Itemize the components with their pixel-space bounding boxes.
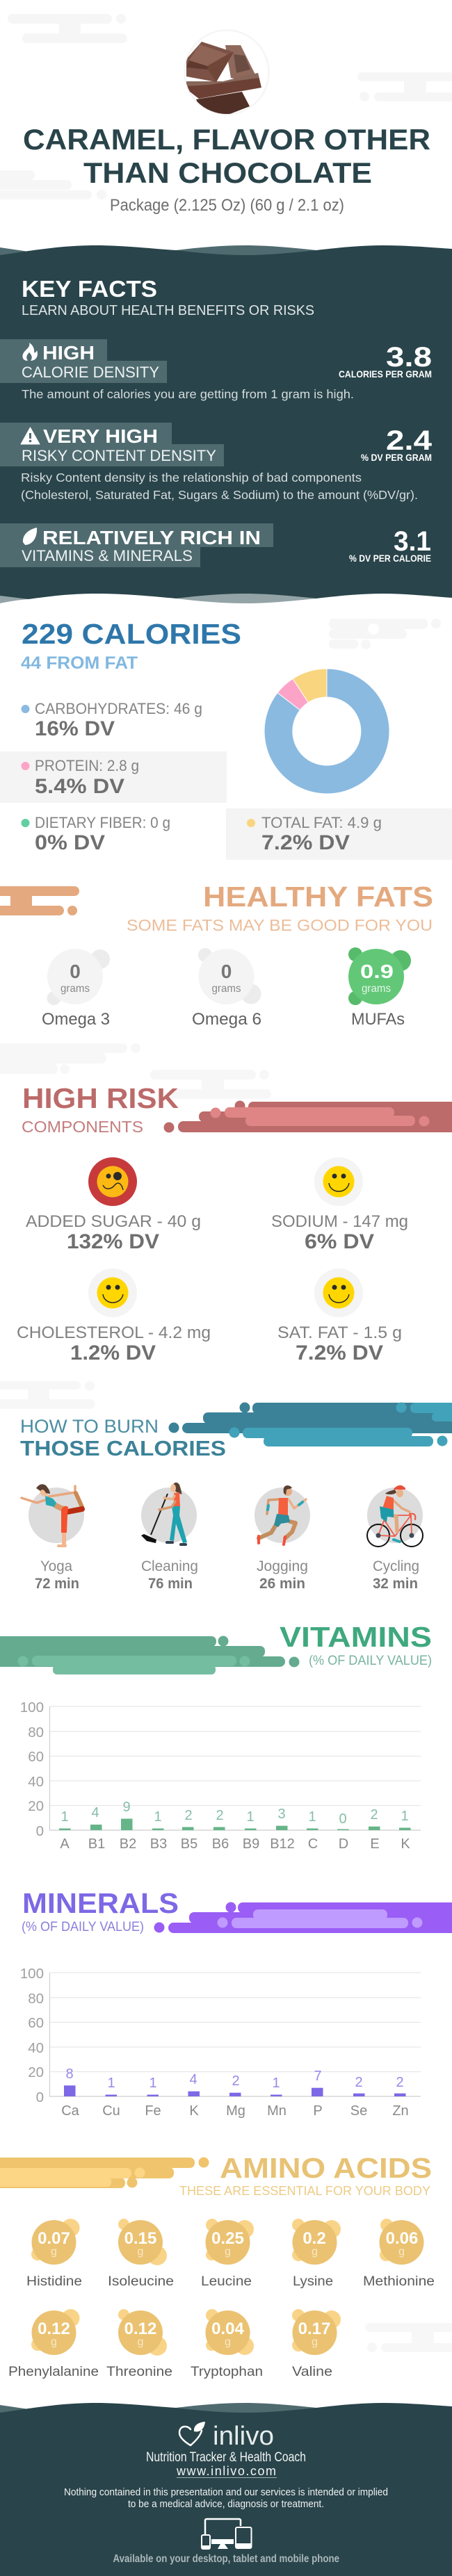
food photo: chocolate pieces	[185, 31, 268, 115]
high risk subheading: COMPONENTS	[22, 1118, 143, 1136]
risk item: sodium: SODIUM - 147 mg	[271, 1212, 408, 1231]
panel: healthy fats	[0, 881, 433, 1029]
legend: protein: PROTEIN: 2.8 g	[35, 757, 139, 774]
title	[23, 123, 430, 189]
bar chart: vitamins: 80	[28, 1725, 44, 1741]
amino: phenylalanine: 0.12	[38, 2320, 70, 2338]
activity labels: 32 min	[373, 1576, 418, 1592]
fact: calorie density: 3.8	[386, 342, 432, 373]
omega 6: 0	[221, 961, 232, 982]
fact: risky content density: Risky Content density is the relationship of bad components	[21, 471, 362, 484]
amino: isoleucine: 0.15	[124, 2229, 156, 2248]
healthy fats subheading: SOME FATS MAY BE GOOD FOR YOU	[127, 916, 433, 934]
decoration: amber bars	[0, 2158, 209, 2188]
amino: methionine: g	[398, 2246, 405, 2258]
fact: calorie density: CALORIES PER GRAM	[339, 368, 432, 380]
bar chart: vitamins: K	[401, 1836, 410, 1852]
fact: vitamins and minerals: VITAMINS & MINERALS	[22, 547, 193, 564]
amino: threonine: g	[138, 2336, 143, 2348]
bar chart: vitamins: 1	[154, 1809, 162, 1825]
fact: risky content density: 2.4	[386, 425, 433, 456]
bar chart: vitamins	[20, 1699, 421, 1852]
amino: isoleucine	[108, 2219, 174, 2289]
background decoration: header clouds	[0, 14, 452, 199]
amino: methionine: 0.06	[386, 2229, 418, 2248]
fact: vitamins and minerals: 3.1	[394, 526, 431, 557]
title: CARAMEL, FLAVOR OTHER	[23, 123, 430, 156]
bar chart: vitamins: 2	[370, 1807, 378, 1823]
bar chart: vitamins: 4	[91, 1805, 99, 1820]
decoration: purple bars	[154, 1902, 452, 1933]
decoration: green bars	[0, 1636, 299, 1674]
risk item: saturated fat: SAT. FAT - 1.5 g	[277, 1323, 402, 1342]
minerals heading: MINERALS	[22, 1887, 179, 1919]
activity: yoga	[22, 1484, 84, 1546]
bar chart: vitamins: E	[370, 1836, 380, 1852]
amino: tryptophan: Tryptophan	[191, 2365, 263, 2379]
activity: jogging	[255, 1485, 310, 1544]
risk item: cholesterol: 1.2% DV	[70, 1342, 156, 1364]
activity labels: Cleaning	[141, 1558, 198, 1574]
risk item: added sugar	[26, 1157, 201, 1253]
activity labels: 26 min	[259, 1576, 305, 1592]
bar chart: minerals: 40	[28, 2040, 44, 2056]
amino acids heading: AMINO ACIDS	[220, 2152, 432, 2184]
amino: leucine: g	[225, 2246, 231, 2258]
omega 6: grams	[211, 983, 241, 995]
risk item: cholesterol	[17, 1269, 211, 1364]
bar chart: vitamins: 2	[184, 1808, 193, 1823]
bar chart: vitamins: B1	[88, 1836, 105, 1852]
fact: vitamins and minerals	[0, 523, 431, 567]
bar chart: vitamins: 20	[28, 1798, 44, 1814]
risk item: added sugar: 132% DV	[67, 1230, 159, 1253]
amino: methionine	[363, 2219, 435, 2289]
calories heading: 229 CALORIES	[22, 618, 241, 650]
bar chart: vitamins: A	[60, 1836, 70, 1852]
amino: histidine: g	[51, 2246, 57, 2258]
high risk heading: HIGH RISK	[22, 1082, 179, 1114]
legend: dietary fiber	[21, 814, 170, 854]
amino: histidine: 0.07	[38, 2229, 70, 2248]
amino: phenylalanine: Phenylalanine	[8, 2365, 99, 2379]
fact: vitamins and minerals: RELATIVELY RICH IN	[42, 527, 261, 548]
bar chart: vitamins: B5	[181, 1836, 197, 1852]
activity labels: Jogging	[257, 1558, 308, 1574]
amino: histidine: Histidine	[26, 2274, 82, 2289]
mufas: 0.9	[360, 961, 394, 982]
amino: valine: g	[312, 2336, 318, 2348]
bar chart: minerals: Fe	[145, 2103, 161, 2119]
panel: minerals	[20, 1887, 452, 2119]
availability note: Available on your desktop, tablet and mobile phone	[113, 2553, 339, 2565]
disclaimer	[64, 2486, 388, 2510]
calories from fat: 44 FROM FAT	[21, 653, 138, 673]
amino: tryptophan: 0.04	[211, 2320, 245, 2338]
risk item: added sugar: ADDED SUGAR - 40 g	[26, 1212, 201, 1231]
panel: key facts	[0, 245, 452, 612]
key facts heading: KEY FACTS	[22, 276, 157, 302]
mufas: MUFAs	[351, 1010, 405, 1029]
risk item: sodium	[271, 1157, 408, 1253]
icon: flame	[22, 343, 38, 361]
bar chart: minerals: Mg	[226, 2103, 245, 2119]
serving size: Package (2.125 Oz) (60 g / 2.1 oz)	[110, 196, 344, 215]
amino: leucine	[201, 2219, 254, 2289]
bar chart: vitamins: 40	[28, 1774, 44, 1790]
bar chart: vitamins: D	[339, 1836, 348, 1852]
bar chart: vitamins: 2	[216, 1808, 224, 1823]
fact: risky content density: (Cholesterol, Saturated Fat, Sugars & Sodium) to the amount (%DV/gr).	[21, 488, 418, 502]
vitamins heading: VITAMINS	[280, 1621, 432, 1653]
key facts subheading: LEARN ABOUT HEALTH BENEFITS OR RISKS	[22, 302, 314, 318]
vitamins subheading: (% OF DAILY VALUE)	[309, 1653, 432, 1668]
website link: www.inlivo.com	[176, 2464, 276, 2478]
disclaimer: Nothing contained in this presentation and our services is intended or implied	[64, 2486, 388, 2498]
bar chart: vitamins: 9	[122, 1800, 131, 1815]
background decoration: mid clouds	[0, 1043, 452, 2352]
bar chart: vitamins: 0	[36, 1823, 44, 1839]
amino: phenylalanine	[8, 2309, 99, 2379]
amino: histidine	[26, 2219, 82, 2289]
icon: warning	[21, 427, 40, 444]
amino: valine: Valine	[292, 2365, 332, 2379]
omega 3	[42, 949, 110, 1029]
bar chart: minerals: 1	[272, 2076, 280, 2091]
bar chart: minerals: 8	[65, 2066, 74, 2082]
legend: protein: 5.4% DV	[35, 775, 124, 798]
amino: lysine: 0.2	[302, 2229, 326, 2248]
panel: how to burn those calories	[20, 1403, 452, 1592]
fact: calorie density: CALORIE DENSITY	[22, 364, 159, 381]
panel: vitamins	[0, 1621, 432, 1852]
activity labels: 76 min	[148, 1576, 193, 1592]
omega 3: Omega 3	[42, 1010, 110, 1029]
panel: calories	[0, 618, 452, 860]
legend: carbohydrates	[21, 700, 202, 740]
activity: cycling	[367, 1485, 423, 1547]
mufas: grams	[362, 983, 391, 995]
bar chart: vitamins: B3	[150, 1836, 167, 1852]
activity labels: Cycling	[373, 1558, 419, 1574]
icon: devices	[202, 2519, 252, 2549]
omega 6	[192, 948, 261, 1029]
legend: protein	[21, 757, 139, 798]
legend: dietary fiber: 0% DV	[35, 831, 105, 854]
decoration: teal bars	[168, 1403, 452, 1446]
minerals subheading: (% OF DAILY VALUE)	[22, 1919, 144, 1934]
burn heading light: HOW TO BURN	[20, 1416, 159, 1437]
bar chart: minerals: Zn	[392, 2103, 409, 2119]
amino: threonine: Threonine	[106, 2365, 172, 2379]
amino: lysine: Lysine	[293, 2274, 333, 2289]
bar chart: minerals: Cu	[102, 2103, 120, 2119]
fact: risky content density	[0, 423, 433, 502]
activity labels: 72 min	[35, 1576, 79, 1592]
amino: isoleucine: Isoleucine	[108, 2274, 174, 2289]
healthy fats heading: HEALTHY FATS	[203, 881, 433, 913]
fact: calorie density: The amount of calories you are getting from 1 gram is high.	[22, 387, 354, 401]
bar chart: minerals: 0	[36, 2089, 44, 2105]
legend: total fat	[247, 814, 382, 854]
fact: vitamins and minerals: % DV PER CALORIE	[349, 553, 431, 564]
mufas	[348, 947, 411, 1029]
legend: total fat: TOTAL FAT: 4.9 g	[261, 814, 382, 831]
donut chart	[264, 669, 389, 794]
fact: calorie density	[0, 339, 432, 401]
legend: carbohydrates: 16% DV	[35, 717, 115, 740]
bar chart: minerals: 1	[149, 2076, 157, 2091]
bar chart: minerals: 1	[107, 2076, 115, 2091]
bar chart: minerals: P	[313, 2103, 323, 2119]
activity labels: Yoga	[40, 1558, 72, 1574]
bar chart: vitamins: 1	[246, 1809, 255, 1825]
amino: phenylalanine: g	[51, 2336, 57, 2348]
fact: risky content density: % DV PER GRAM	[361, 452, 432, 463]
bar chart: vitamins: 3	[277, 1807, 286, 1822]
disclaimer: to be a medical advice, diagnosis or treatment.	[128, 2498, 324, 2510]
amino: valine	[292, 2309, 341, 2379]
risk item: cholesterol: CHOLESTEROL - 4.2 mg	[17, 1323, 211, 1342]
amino: lysine: g	[312, 2246, 318, 2258]
activity: cleaning	[141, 1483, 197, 1546]
risk item: saturated fat: 7.2% DV	[296, 1342, 383, 1364]
amino: isoleucine: g	[138, 2246, 143, 2258]
risk item: saturated fat	[277, 1269, 402, 1364]
decoration: red bars	[164, 1101, 452, 1133]
bar chart: vitamins: 1	[60, 1809, 69, 1825]
bar chart: vitamins: B9	[243, 1836, 259, 1852]
title: THAN CHOCOLATE	[83, 156, 372, 189]
amino: tryptophan	[191, 2309, 263, 2379]
bar chart: minerals: 60	[28, 2015, 44, 2031]
legend band: total fat	[226, 808, 452, 860]
amino: tryptophan: g	[225, 2336, 231, 2348]
bar chart: minerals	[20, 1966, 421, 2119]
bar chart: minerals: 100	[20, 1966, 44, 1982]
bar chart: minerals: Ca	[61, 2103, 80, 2119]
omega 3: grams	[60, 983, 90, 995]
icon: leaf	[23, 528, 37, 545]
bar chart: vitamins: C	[308, 1836, 318, 1852]
amino: lysine	[292, 2219, 341, 2289]
panel: amino acids	[0, 2152, 435, 2379]
bar chart: minerals: 20	[28, 2064, 44, 2080]
bar chart: minerals: Mn	[267, 2103, 286, 2119]
amino: threonine: 0.12	[124, 2320, 156, 2338]
bar chart: vitamins: 1	[308, 1809, 316, 1825]
bar chart: minerals: K	[189, 2103, 199, 2119]
fact: calorie density: HIGH	[42, 342, 95, 364]
logo: inlivo: inlivo	[213, 2422, 274, 2451]
omega 3: 0	[70, 961, 81, 982]
legend: carbohydrates: CARBOHYDRATES: 46 g	[35, 700, 202, 717]
fact: risky content density: VERY HIGH	[43, 425, 158, 447]
omega 6: Omega 6	[192, 1010, 261, 1029]
amino acids subheading: THESE ARE ESSENTIAL FOR YOUR BODY	[179, 2183, 430, 2198]
bar chart: vitamins: 100	[20, 1699, 44, 1715]
bar chart: vitamins: 1	[401, 1809, 409, 1824]
bar chart: vitamins: 60	[28, 1749, 44, 1765]
legend: dietary fiber: DIETARY FIBER: 0 g	[35, 814, 170, 831]
panel: footer	[0, 2403, 452, 2576]
bar chart: minerals: 2	[232, 2073, 240, 2089]
burn heading bold: THOSE CALORIES	[20, 1436, 226, 1460]
fact: risky content density: RISKY CONTENT DENSITY	[22, 447, 216, 464]
panel: high risk	[17, 1082, 452, 1364]
bar chart: minerals: 4	[189, 2072, 197, 2087]
activity labels	[35, 1558, 419, 1592]
amino: valine: 0.17	[298, 2320, 330, 2338]
bar chart: vitamins: B12	[270, 1836, 295, 1852]
amino: threonine	[106, 2309, 172, 2379]
legend: total fat: 7.2% DV	[261, 831, 350, 854]
bar chart: minerals: 80	[28, 1991, 44, 2007]
amino: leucine: Leucine	[201, 2274, 252, 2289]
legend band: protein	[0, 751, 227, 803]
risk item: sodium: 6% DV	[305, 1230, 374, 1253]
bar chart: vitamins: 0	[339, 1811, 347, 1827]
logo: inlivo	[179, 2422, 274, 2451]
amino: leucine: 0.25	[211, 2229, 244, 2248]
amino: methionine: Methionine	[363, 2274, 435, 2289]
bar chart: vitamins: B2	[120, 1836, 136, 1852]
bar chart: minerals: 2	[396, 2075, 404, 2090]
bar chart: minerals: 2	[355, 2075, 363, 2090]
bar chart: minerals: 7	[314, 2069, 322, 2084]
bar chart: minerals: Se	[350, 2103, 367, 2119]
bar chart: vitamins: B6	[212, 1836, 229, 1852]
tagline: Nutrition Tracker & Health Coach	[146, 2450, 306, 2465]
